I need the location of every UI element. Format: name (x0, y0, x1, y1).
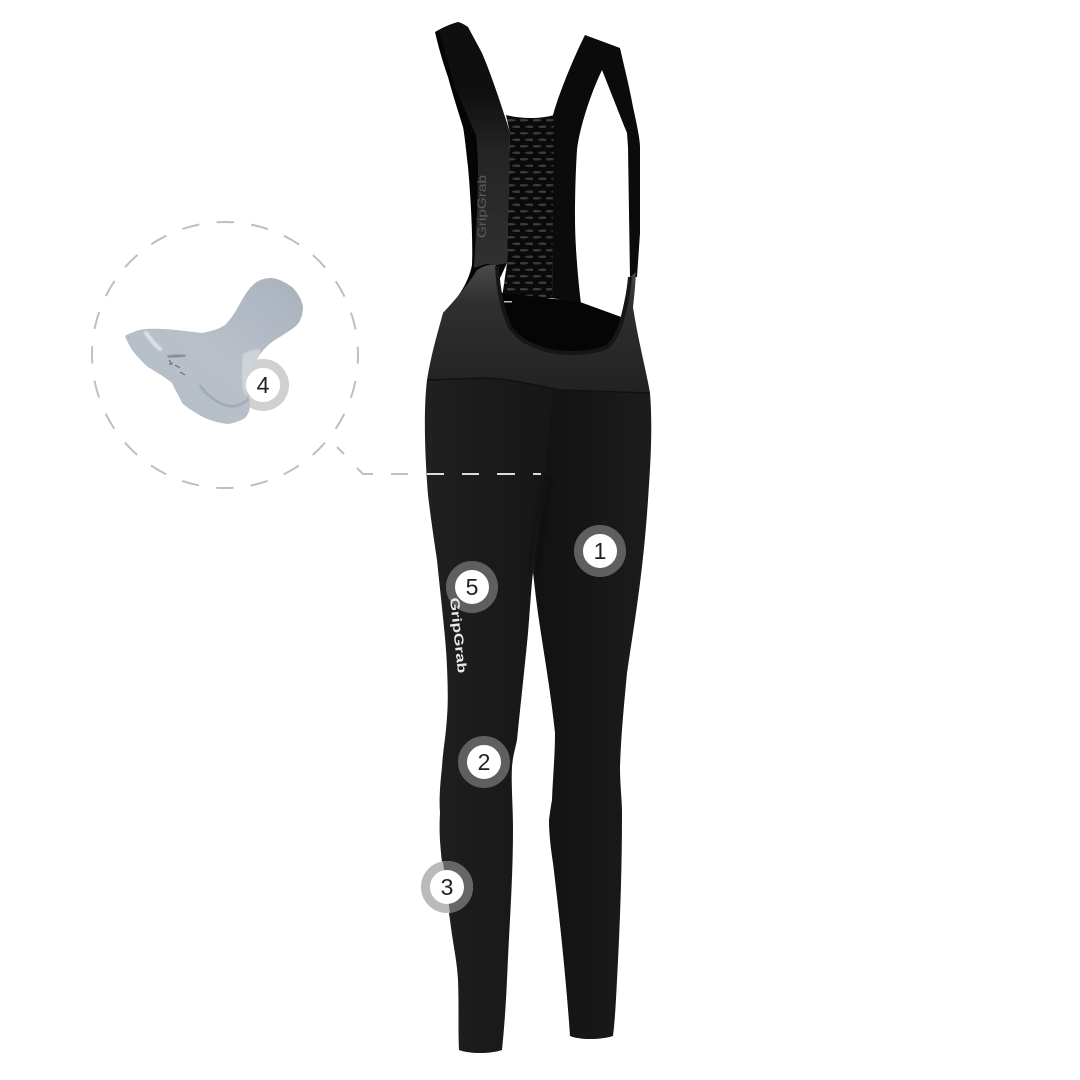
pad front highlight (146, 333, 160, 349)
left leg (425, 350, 562, 1053)
badge 3 (426, 866, 468, 908)
left strap, front band with logo (439, 22, 510, 268)
badge 1: 1 (594, 538, 606, 564)
strap logo text: GripGrab (475, 175, 489, 238)
badge 5: 5 (466, 574, 478, 600)
infographic canvas (91, 22, 652, 1053)
connector line from circle to tights (337, 447, 541, 474)
chamois pad (125, 278, 303, 424)
inside back of bib (497, 292, 624, 354)
badge 4 ring (242, 364, 284, 406)
badge 2: 2 (478, 749, 490, 775)
badge 4: 4 (257, 372, 270, 398)
right leg (533, 370, 651, 1039)
badge 1 (578, 530, 622, 572)
pad smudge (169, 355, 184, 357)
thigh logo text: GripGrab (447, 597, 470, 674)
waist seam (427, 378, 650, 393)
tiny inner label (504, 301, 512, 302)
pad logo mark (169, 360, 185, 375)
badge 4 (246, 368, 280, 402)
badge 2 (462, 740, 506, 784)
neckline binding (497, 266, 630, 353)
mesh back panel (502, 115, 554, 298)
dashed detail circle (92, 222, 358, 488)
product: bib tights (425, 22, 651, 1053)
badge 3: 3 (441, 874, 453, 900)
pad pale side area (242, 350, 261, 396)
back strap, right (552, 35, 640, 304)
upper waist panel (427, 265, 650, 393)
left strap, dark outer edge (435, 22, 510, 313)
badge 5 (450, 566, 494, 608)
inner thigh crease shadow (533, 480, 546, 572)
pad ridge shadow (200, 385, 248, 406)
